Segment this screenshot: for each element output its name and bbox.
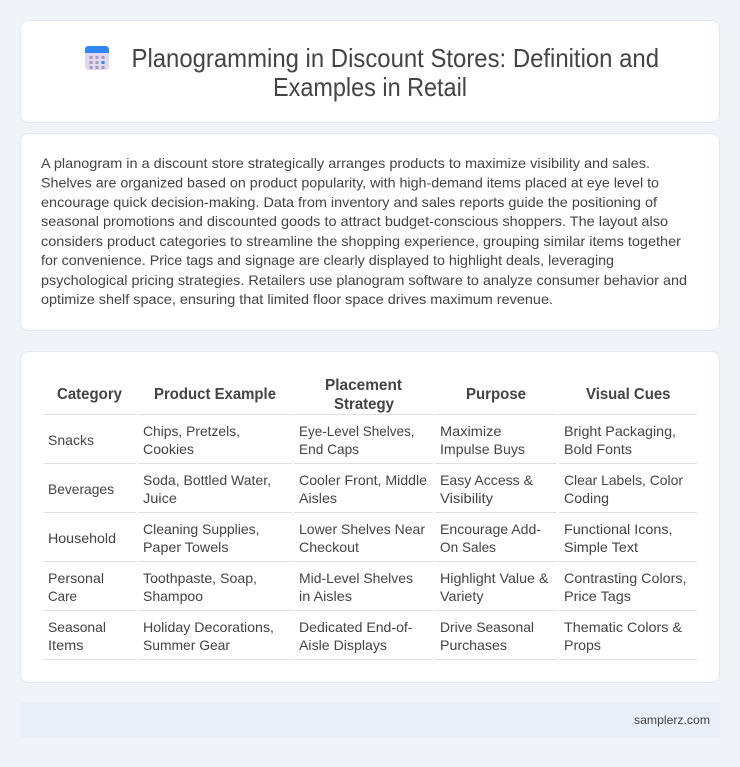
table header row [43, 377, 697, 415]
panel: title card [20, 20, 720, 122]
table header row: Strategy [334, 396, 394, 413]
table row: beverages: Aisles [299, 490, 337, 506]
panel: description text block [20, 134, 720, 330]
panel: description text block: optimize shelf space, ensuring that limited floor space drives maximum revenue. [41, 291, 553, 307]
table row: personal care: in Aisles [299, 588, 352, 604]
table row: snacks: Eye-Level Shelves, [299, 423, 414, 439]
title: Planogramming in Discount Stores: Definition and [132, 45, 659, 73]
table row: beverages: Easy Access & [440, 472, 534, 488]
table header row: Placement [325, 377, 403, 394]
table row: personal care: Highlight Value & [440, 570, 549, 586]
table row: beverages: Visibility [440, 490, 493, 506]
table row: personal care: Personal [48, 570, 104, 586]
table row: household: Cleaning Supplies, [143, 521, 260, 537]
panel: description text block: A planogram in a discount store strategically arranges products to maximize visibility and sales. [41, 155, 650, 171]
table row: personal care: Variety [440, 588, 484, 604]
table row: snacks: Cookies [143, 441, 194, 457]
table row: household: Household [48, 530, 116, 546]
table row: snacks [43, 423, 697, 464]
table row: household: Encourage Add- [440, 521, 541, 537]
footer bar [20, 703, 720, 737]
table row: beverages: Coding [564, 490, 609, 506]
icon: calendar planogram grid [85, 46, 109, 70]
footer bar: samplerz.com [634, 713, 710, 727]
panel: description text block: seasonal promotions and discounted goods to attract budget-conscious shoppers. The layout also [41, 213, 668, 229]
table row: seasonal items: Holiday Decorations, [143, 619, 274, 635]
table row: household: Lower Shelves Near [299, 521, 425, 537]
table row: beverages: Juice [143, 490, 177, 506]
table row: beverages: Soda, Bottled Water, [143, 472, 271, 488]
panel: description text block: for convenience. Price tags and signage are clearly displayed to highlight deals, leveraging [41, 252, 614, 268]
table row: household: Simple Text [564, 539, 638, 555]
table row: snacks: Bright Packaging, [564, 423, 676, 439]
panel: description text block: encourage quick decision-making. Data from inventory and sales reports guide the positioning of [41, 194, 657, 210]
table row: personal care [43, 570, 697, 611]
table row: personal care: Care [48, 588, 77, 604]
table row: seasonal items: Items [48, 637, 84, 653]
table row: personal care: Toothpaste, Soap, [143, 570, 257, 586]
table row: seasonal items: Seasonal [48, 619, 106, 635]
panel: description text block: psychological pricing strategies. Retailers use planogram software to analyze consumer behavior and [41, 272, 687, 288]
table row: snacks: Maximize [440, 423, 502, 439]
table row: personal care: Shampoo [143, 588, 203, 604]
table row: beverages [43, 472, 697, 513]
panel: description text block: Shelves are organized based on product popularity, with high-demand items placed at eye level to [41, 174, 659, 190]
table row: seasonal items: Purchases [440, 637, 507, 653]
table row: household: Checkout [299, 539, 359, 555]
table row: household: Paper Towels [143, 539, 228, 555]
table row: beverages: Clear Labels, Color [564, 472, 683, 488]
panel: description text block: considers product categories to streamline the shopping experience, grouping similar items together [41, 233, 681, 249]
table header row: Product Example [154, 386, 276, 403]
table row: snacks: End Caps [299, 441, 359, 457]
table row: seasonal items: Summer Gear [143, 637, 230, 653]
table header row: Visual Cues [586, 386, 671, 403]
table row: household: On Sales [440, 539, 496, 555]
table row: seasonal items: Props [564, 637, 601, 653]
table row: household [43, 521, 697, 562]
table row: seasonal items [43, 619, 697, 660]
table row: personal care: Contrasting Colors, [564, 570, 686, 586]
table row: seasonal items: Thematic Colors & [564, 619, 683, 635]
title [132, 45, 659, 102]
table row: personal care: Mid-Level Shelves [299, 570, 413, 586]
table row: seasonal items: Drive Seasonal [440, 619, 534, 635]
table row: beverages: Cooler Front, Middle [299, 472, 427, 488]
panel: planogram table [20, 352, 720, 682]
table row: seasonal items: Dedicated End-of- [299, 619, 413, 635]
table row: snacks: Snacks [48, 432, 94, 448]
table row: beverages: Beverages [48, 481, 114, 497]
table row: seasonal items: Aisle Displays [299, 637, 387, 653]
table row: snacks: Bold Fonts [564, 441, 632, 457]
table row: snacks: Impulse Buys [440, 441, 525, 457]
table row: personal care: Price Tags [564, 588, 631, 604]
title: Examples in Retail [273, 74, 467, 102]
table row: household: Functional Icons, [564, 521, 672, 537]
table row: snacks: Chips, Pretzels, [143, 423, 240, 439]
table header row: Category [57, 386, 122, 403]
table header row: Purpose [466, 386, 526, 403]
